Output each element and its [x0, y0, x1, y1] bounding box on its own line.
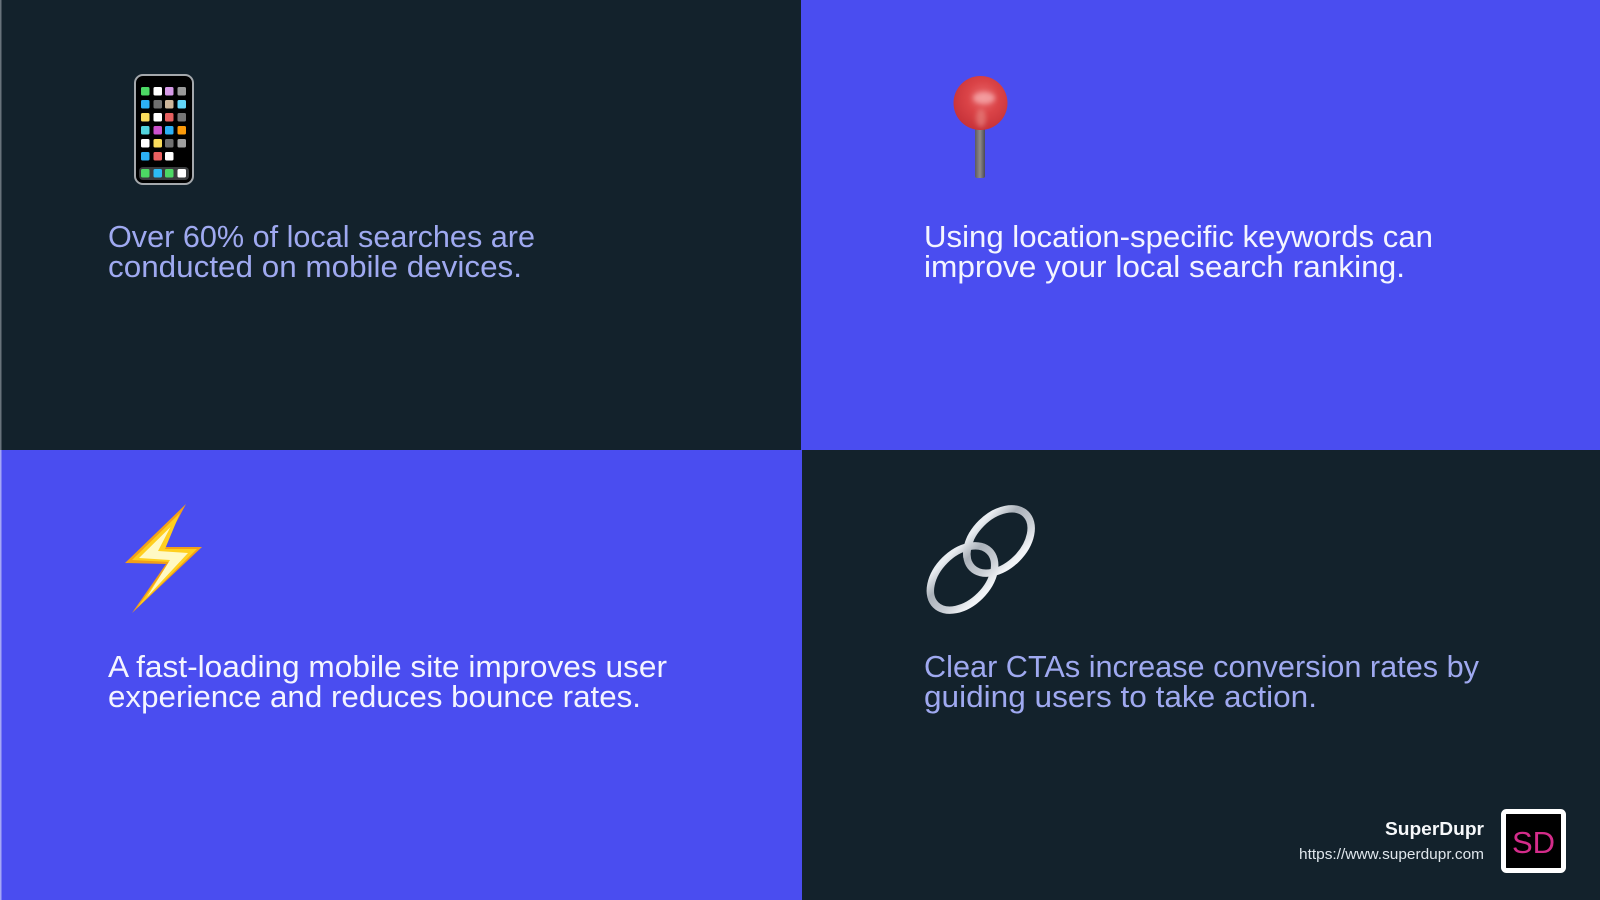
- text: mobile searches: Over 60% of local searches are: [108, 219, 535, 254]
- icon: round pushpin: [954, 76, 1008, 178]
- text: mobile searches: [108, 219, 535, 284]
- panel: mobile searches: [0, 0, 801, 450]
- icon: mobile phone: [135, 75, 193, 184]
- logo: SD: [1512, 825, 1555, 860]
- text: fast-loading site: experience and reduces bounce rates.: [108, 679, 641, 714]
- text: fast-loading site: A fast-loading mobile site improves user: [108, 649, 667, 684]
- text: clear CTAs: guiding users to take action.: [924, 679, 1317, 714]
- text: location keywords: improve your local search ranking.: [924, 249, 1405, 284]
- panel: clear CTAs: [925, 505, 1566, 873]
- brand name: SuperDupr: [1385, 819, 1484, 839]
- text: fast-loading site: [108, 649, 667, 714]
- panel: fast-loading site: [0, 450, 802, 900]
- text: clear CTAs: Clear CTAs increase conversion rates by: [924, 649, 1479, 684]
- brand URL: https://www.superdupr.com: [1299, 847, 1484, 863]
- text: clear CTAs: [924, 649, 1479, 714]
- logo: [1504, 812, 1564, 870]
- brand block: [1299, 812, 1564, 870]
- icon: chain link: [926, 505, 1035, 614]
- text: mobile searches: conducted on mobile devices.: [108, 249, 522, 284]
- text: location keywords: [924, 219, 1433, 284]
- icon: lightning bolt: [125, 504, 202, 613]
- text: location keywords: Using location-specific keywords can: [924, 219, 1433, 254]
- panel: location keywords: [801, 0, 1600, 450]
